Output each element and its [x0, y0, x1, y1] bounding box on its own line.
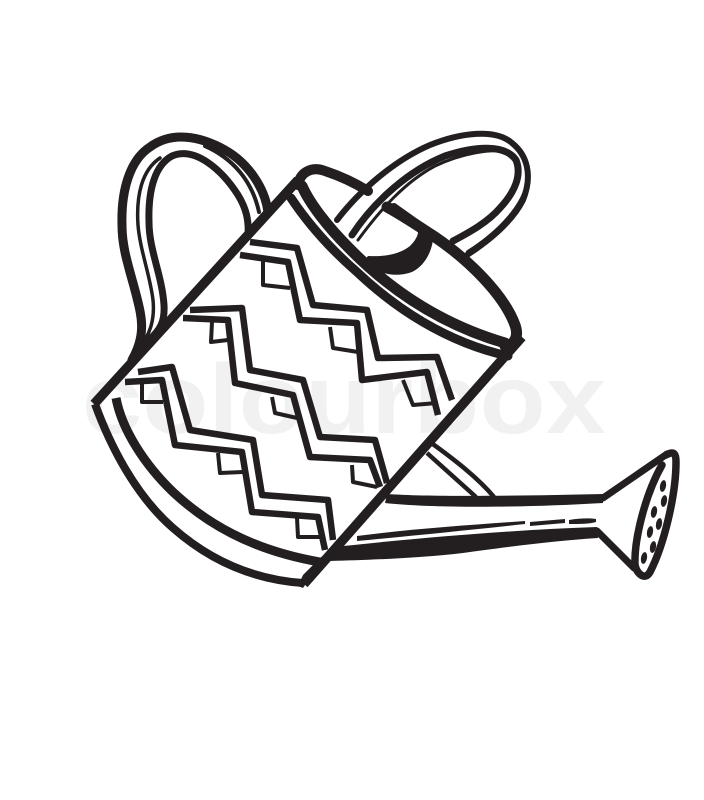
squares: top band	[263, 260, 437, 405]
can body outline	[94, 180, 522, 588]
spout holes	[640, 480, 668, 564]
squares: middle band	[211, 322, 377, 487]
right handle	[337, 134, 528, 255]
zigzag band: middle	[183, 308, 387, 487]
spout brace	[427, 442, 494, 497]
spout head outline	[597, 453, 676, 576]
can rim	[291, 169, 517, 356]
zigzag band: bottom	[125, 367, 333, 550]
handle grip inside can	[363, 203, 433, 275]
watermark text: colourbox	[82, 344, 606, 454]
squares: bottom band	[142, 383, 320, 537]
zigzag band: top	[240, 242, 452, 415]
spout	[330, 494, 603, 561]
left handle	[122, 137, 268, 360]
